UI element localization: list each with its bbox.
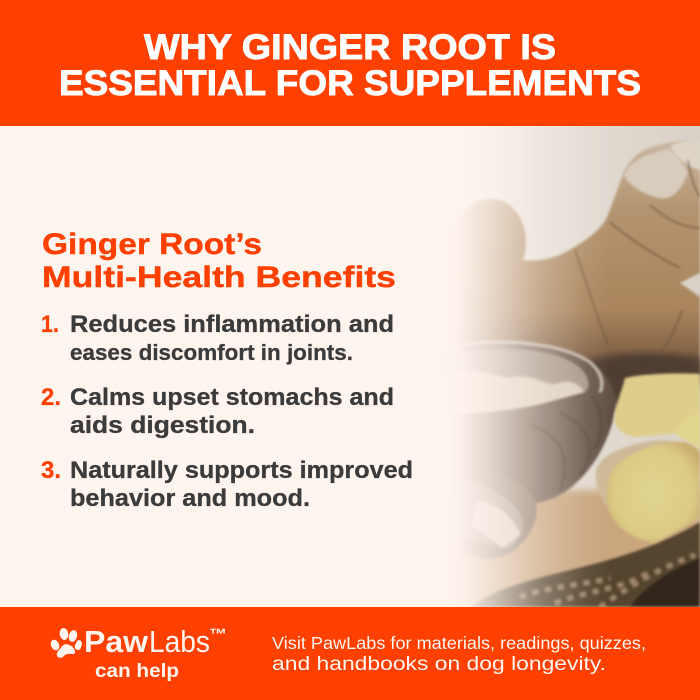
footer text: [272, 633, 646, 675]
wooden board: [440, 490, 700, 607]
upper ginger slice: [614, 373, 700, 450]
small bowl with powder: [474, 491, 538, 558]
logo: PawLabs: [49, 624, 227, 682]
lower ginger slice: [596, 440, 700, 543]
benefit 1: Reduces inflammation and: [70, 311, 394, 338]
benefit 2: aids digestion.: [70, 412, 255, 439]
logo: PawLabs: Labs: [149, 624, 210, 659]
benefit 3: behavior and mood.: [70, 485, 310, 512]
logo: PawLabs: can help: [95, 661, 179, 682]
photo: ginger root and bowls of powder: [440, 126, 700, 607]
list: benefits: [41, 311, 413, 512]
footer text: Visit PawLabs for materials, readings, quizzes,: [272, 633, 646, 653]
ginger root: [440, 140, 700, 375]
wooden bowl: [450, 341, 616, 505]
heading: benefits: Multi-Health Benefits: [42, 261, 396, 294]
bark: [470, 522, 700, 607]
footer text: and handbooks on dog longevity.: [272, 654, 606, 675]
title: ESSENTIAL FOR SUPPLEMENTS: [59, 63, 641, 103]
fade overlay: [440, 126, 610, 607]
logo: PawLabs: ™: [209, 626, 227, 643]
benefit 2: 2.: [41, 384, 61, 411]
title: WHY GINGER ROOT IS: [144, 27, 556, 67]
title: [59, 27, 641, 103]
benefit 3: [41, 457, 413, 512]
benefit 3: 3.: [41, 457, 61, 484]
heading: benefits: Ginger Root’s: [42, 228, 262, 261]
benefit 1: 1.: [41, 311, 59, 338]
footer band: [0, 607, 700, 700]
dark band behind bowl and slices: [585, 353, 700, 410]
benefit 1: eases discomfort in joints.: [70, 340, 353, 365]
heading: benefits: [42, 228, 396, 294]
page background panel: [0, 126, 700, 607]
benefit 1: [41, 311, 394, 365]
icon: paw print: [49, 627, 82, 658]
benefit 2: [41, 384, 394, 439]
header band: [0, 0, 700, 126]
logo: PawLabs: Paw: [84, 624, 149, 659]
benefit 2: Calms upset stomachs and: [70, 384, 394, 411]
benefit 3: Naturally supports improved: [70, 457, 413, 484]
ginger powder: [475, 373, 584, 412]
